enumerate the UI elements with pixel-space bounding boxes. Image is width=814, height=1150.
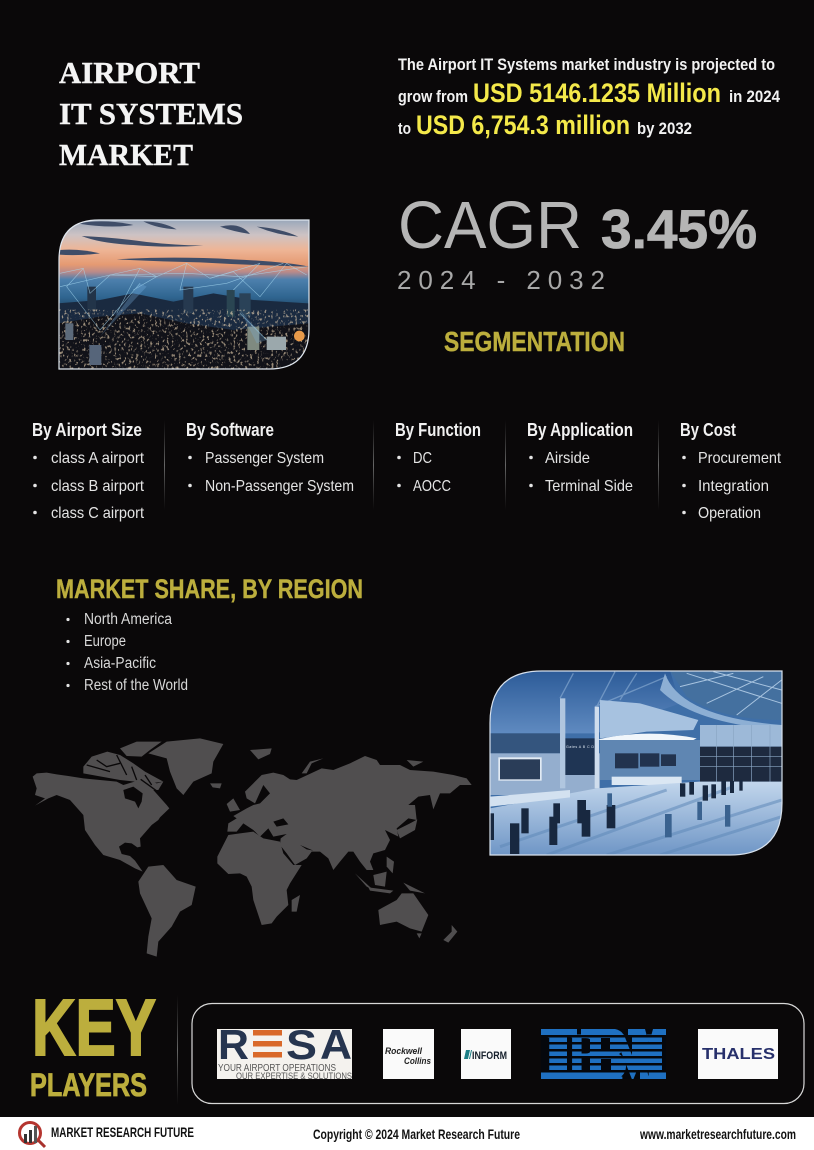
key players heading: KEY [32,983,156,1072]
logo: rockwell collins [383,1029,434,1079]
projection text block: by 2032 [637,119,692,138]
north america [33,773,169,872]
footer: MARKET RESEARCH FUTURE [51,1124,194,1140]
column: by function [395,420,481,495]
column: by cost: Integration [698,478,769,495]
region list: Europe [84,633,126,650]
title: AIRPORT [59,55,200,90]
logo: rockwell collins: Rockwell [385,1046,422,1057]
column: by cost: Operation [698,505,761,522]
projection text block: in 2024 [729,87,780,106]
column: by airport size: class C airport [51,505,145,522]
column: by software: Non-Passenger System [205,478,354,495]
projection text block [398,55,780,140]
column: by software [186,420,354,495]
projection text block: USD 6,754.3 million [416,110,630,140]
column: by function: AOCC [413,478,451,495]
arctic archipelago [83,752,163,783]
column: by airport size: By Airport Size [32,420,142,440]
left wall [490,733,562,753]
iceland and svalbard [210,783,222,788]
CAGR figure: 2024 - 2032 [397,265,605,295]
column: by cost [680,420,782,522]
image: airport terminal [490,671,782,855]
column: by application [527,420,633,495]
logo: resa: OUR EXPERTISE & SOLUTIONS [236,1071,352,1082]
clouds [59,221,309,267]
heading: market share by region: MARKET SHARE, BY REGION [56,574,363,604]
ceiling [490,671,680,733]
footer: Copyright © 2024 Market Research Future [313,1126,520,1142]
dark hills and city [60,293,308,330]
world map [33,738,472,957]
column: by function: DC [413,450,432,467]
image frame: airport [490,671,782,855]
floor [490,782,782,855]
right wall window [700,725,782,747]
CAGR figure [397,188,757,295]
CAGR figure: 3.45% [601,198,757,260]
title: IT SYSTEMS [59,96,243,131]
column: by application: Airside [545,450,590,467]
projection text block: to [398,119,411,138]
region list: North America [84,611,172,628]
column: by cost: By Cost [680,420,736,440]
glass roof [670,671,782,720]
islands of europe and asia [227,798,240,812]
title [59,55,243,172]
gate sign: Gates A B C D [566,745,594,749]
key players heading: PLAYERS [30,1067,147,1103]
image: city network skyline [59,220,309,369]
logo: resa: YOUR AIRPORT OPERATIONS [218,1063,336,1074]
logo: inform: INFORM [472,1050,507,1062]
region list: Asia-Pacific [84,655,156,672]
logo: resa: R [218,1021,249,1068]
greenland [148,738,223,795]
logo: rockwell collins: Collins [404,1056,431,1067]
eurasia [227,756,472,870]
image frame: city [59,220,309,369]
column: by airport size [32,420,145,522]
column: by application: Terminal Side [545,478,633,495]
africa [217,832,302,925]
heading: segmentation: SEGMENTATION [444,326,625,357]
logo: thales [698,1029,778,1079]
logo: thales: THALES [702,1046,775,1063]
logo: inform [461,1029,511,1079]
key players heading [30,983,156,1103]
column: by airport size: class B airport [51,478,145,495]
key players panel [192,1004,804,1104]
counters [600,740,700,780]
icon: market research future [20,1122,45,1147]
logo: resa: E [253,1021,282,1068]
column: by application: By Application [527,420,633,440]
region list: Rest of the World [84,677,188,694]
title: MARKET [59,137,193,172]
region list [66,611,188,694]
australia [378,893,428,932]
column: by software: Passenger System [205,450,324,467]
logo: resa [217,1021,352,1082]
column: by function: By Function [395,420,481,440]
projection text block: grow from [398,87,468,106]
south america [138,865,196,957]
CAGR figure: CAGR [398,188,582,263]
people [490,780,743,854]
projection text block: USD 5146.1235 Million [473,78,721,108]
canopy [600,700,698,738]
column: by software: By Software [186,420,274,440]
logo: resa: A [320,1021,352,1068]
logo: resa: S [286,1021,317,1068]
footer [0,1117,814,1150]
column: by cost: Procurement [698,450,782,467]
column: by airport size: class A airport [51,450,145,467]
network lines [60,263,307,340]
logo: ibm: IBM [542,1018,665,1094]
